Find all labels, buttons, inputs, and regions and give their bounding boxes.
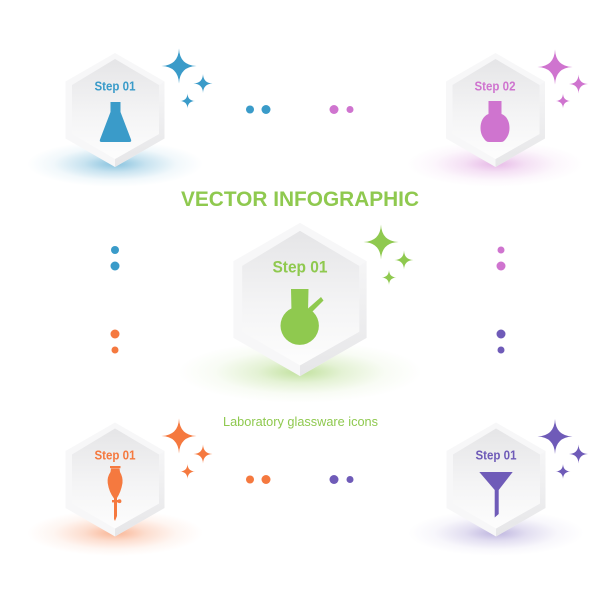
hexagon: orange (66, 422, 164, 536)
label: step 01: Step 01 (94, 80, 136, 94)
label: step 01: Step 01 (94, 448, 136, 462)
icon: two-neck flask (280, 289, 324, 345)
icon: sparkles (538, 50, 588, 108)
icon: separatory funnel (108, 466, 123, 521)
glow: green (178, 341, 422, 403)
label: step 01: Step 01 (476, 448, 517, 462)
connector dots: bottom (246, 475, 354, 484)
panel: step 01 purple funnel (408, 419, 588, 556)
hexagon: green (233, 223, 367, 376)
panel: central step 01 green flask (178, 223, 422, 403)
label: step 02: Step 02 (474, 80, 516, 94)
glow: pink (407, 141, 583, 187)
panel: step 01 orange separatory funnel (27, 418, 212, 556)
icon: sparkles (162, 418, 212, 479)
icon: sparkles (162, 48, 212, 108)
icon: round-bottom flask (480, 101, 510, 142)
connector dots: top (246, 105, 354, 114)
icon: sparkles (364, 224, 414, 285)
icon: sparkles (538, 419, 588, 479)
title: VECTOR INFOGRAPHIC (181, 187, 419, 211)
hexagon: pink (446, 53, 545, 167)
glow: orange (27, 510, 203, 556)
icon: filter funnel (479, 472, 513, 518)
hexagon: purple (446, 422, 546, 536)
glow: purple (408, 510, 584, 556)
panel: step 02 pink flask (407, 50, 588, 187)
glow: blue (27, 141, 203, 187)
subtitle: Laboratory glassware icons (223, 415, 378, 429)
label: step 01: Step 01 (272, 258, 328, 276)
hexagon: blue (66, 53, 164, 167)
panel: step 01 blue flask (27, 48, 212, 187)
connector dots: right (496, 246, 506, 354)
icon: conical flask (100, 102, 131, 142)
connector dots: left (110, 246, 120, 354)
